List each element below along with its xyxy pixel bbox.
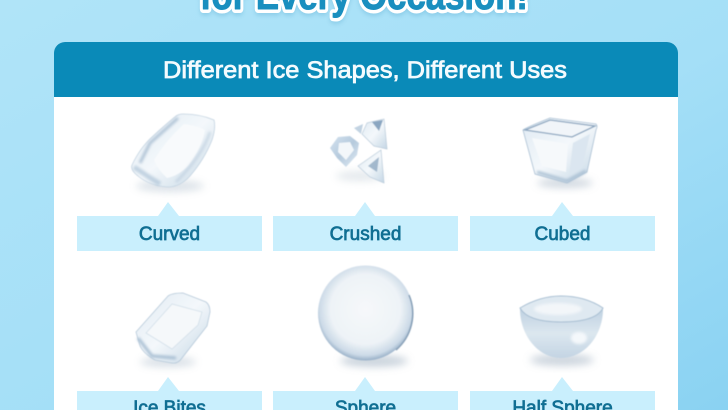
item: cubed [470,118,655,251]
item: curved [77,114,262,251]
item: crushed [273,119,458,251]
panel header [54,42,678,97]
item: ice bites [77,293,262,410]
icon: cubed ice [523,118,597,188]
heading: Different Ice Shapes, Different Uses [163,57,567,84]
label: cubed: Cubed [534,224,590,245]
label: crushed [273,202,458,251]
icon: crushed ice [330,119,387,183]
label: curved: Curved [139,224,200,245]
icon: half sphere [520,296,603,366]
label: sphere [273,377,458,410]
label: half sphere [470,377,655,410]
icon: curved ice [132,114,215,192]
panel: ice shapes [54,42,678,410]
label: ice bites [77,377,262,410]
label: crushed: Crushed [330,224,401,245]
item: half sphere [470,296,655,410]
icon: sphere [318,266,413,367]
label: curved [77,202,262,251]
item: sphere [273,266,458,410]
icon: ice bites [136,293,210,367]
label: cubed [470,202,655,251]
